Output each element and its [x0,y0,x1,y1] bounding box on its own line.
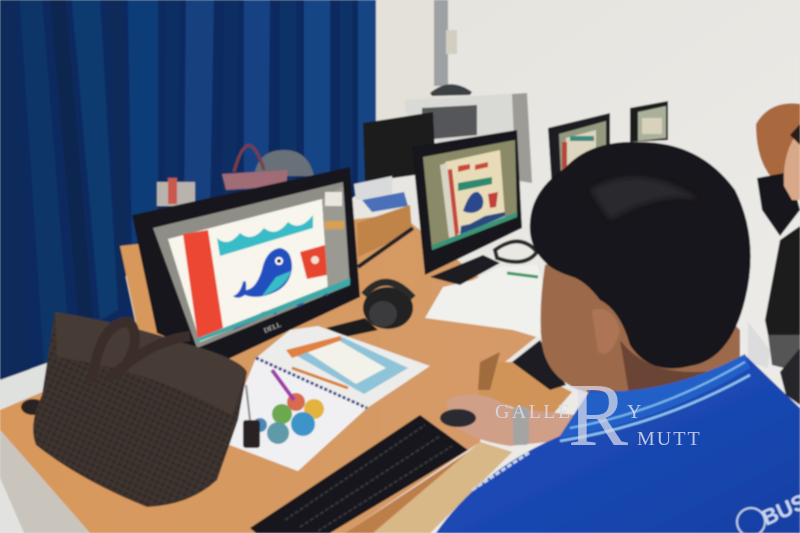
main person [436,142,800,533]
keyboard left [250,415,468,533]
watermark: Y [627,401,641,423]
desk: back extension [120,214,545,390]
monitor screen artwork [168,186,350,343]
far monitor 2 [548,113,610,188]
watermark: R [568,366,628,465]
black chair edge [780,348,800,405]
monitor stand [430,255,500,285]
cable pole [358,228,413,267]
dell monitor back [354,112,436,257]
floor [0,360,135,412]
hand [446,395,575,446]
middle monitor [412,130,537,285]
shirt collar [560,354,750,438]
face and neck [541,230,740,400]
blue shirt [436,355,800,533]
keyboard right [512,340,566,390]
watermark [495,366,702,465]
back items: bag, chair, bottles [157,145,314,206]
curtain [0,0,376,380]
monitor logo: DELL [263,321,282,335]
ear [592,309,620,354]
book [222,326,430,471]
papers [425,265,545,338]
watermark: MUTT [637,428,702,450]
handbag [21,312,260,507]
printer [405,93,532,183]
far monitor 1 [630,101,668,142]
hair [530,142,751,368]
desk: main top [0,300,572,533]
headphones [326,282,413,337]
watermark: GALLE [495,401,573,423]
people in background [748,103,800,372]
main monitor [132,167,360,362]
